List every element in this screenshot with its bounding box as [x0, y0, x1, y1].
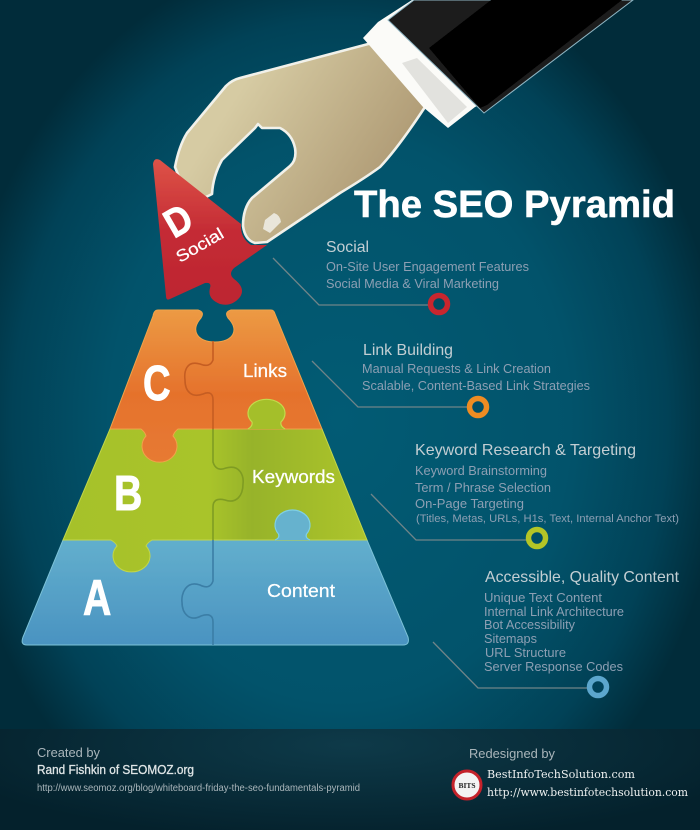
cuff fold	[402, 58, 467, 123]
ring marker blue	[590, 678, 606, 696]
letter B: B	[114, 467, 142, 521]
logo: BITS: BITS	[458, 781, 476, 790]
callout: Link Building: Scalable, Content-Based Link Strategies	[362, 378, 590, 393]
callout: Social: Social Media & Viral Marketing	[326, 276, 499, 291]
callout: Keyword Research: Keyword Research & Targeting	[415, 442, 636, 459]
puzzle pyramid	[22, 310, 408, 645]
callout: Accessible Content: Internal Link Architecture	[484, 604, 624, 619]
tier A tab	[275, 510, 310, 540]
footer credits left: Created by	[37, 746, 101, 760]
ring marker green	[528, 530, 546, 546]
footer credits right	[453, 747, 689, 799]
callout: Accessible Content	[433, 569, 680, 696]
tier A: Content	[22, 540, 408, 645]
callout: Accessible Content: URL Structure	[485, 645, 566, 660]
callout: Link Building	[312, 342, 590, 416]
footer credits left: http://www.seomoz.org/blog/whiteboard-friday-the-seo-fundamentals-pyramid	[37, 783, 360, 794]
callout: Accessible Content: Bot Accessibility	[484, 617, 575, 632]
tier B tab	[248, 399, 285, 429]
puzzle piece D: Social	[153, 159, 267, 305]
callout: Link Building: Manual Requests & Link Creation	[362, 361, 551, 376]
letter D: D	[156, 196, 201, 247]
ring marker red	[430, 296, 448, 312]
letter C: C	[143, 357, 171, 411]
callout: Accessible Content: Accessible, Quality Content	[485, 569, 680, 586]
footer band	[0, 729, 700, 830]
jacket sleeve	[388, 0, 633, 113]
footer credits right: http://www.bestinfotechsolution.com	[487, 786, 689, 799]
label Content: Content	[267, 581, 335, 601]
callout: Keyword Research: (Titles, Metas, URLs, H1s, Text, Internal Anchor Text)	[416, 513, 679, 525]
tier C: Links	[110, 310, 322, 462]
jacket black interior	[429, 0, 622, 108]
footer credits right: BestInfoTechSolution.com	[487, 767, 635, 781]
vertical puzzle seams	[182, 341, 243, 645]
callout: Keyword Research: Term / Phrase Selection	[415, 480, 551, 495]
hand and sleeve	[175, 0, 633, 243]
tier B: Keywords	[63, 429, 367, 572]
ring marker orange	[470, 398, 486, 416]
callout: Social	[273, 239, 529, 312]
letter A: A	[83, 569, 111, 626]
label Social: Social	[173, 225, 227, 266]
callout: Accessible Content: Server Response Codes	[484, 659, 623, 674]
shirt cuff	[363, 0, 490, 128]
title: The SEO Pyramid	[354, 184, 675, 226]
label Keywords: Keywords	[252, 467, 335, 487]
callout: Keyword Research: Keyword Brainstorming	[415, 463, 547, 478]
callout: Keyword Research	[371, 442, 679, 546]
footer credits left: Rand Fishkin of SEOMOZ.org	[37, 762, 194, 777]
callout: Social: Social	[326, 239, 369, 256]
logo: BITS	[453, 771, 481, 799]
icon: hand	[175, 43, 445, 243]
callout: Accessible Content: Sitemaps	[484, 631, 537, 646]
callout: Link Building: Link Building	[363, 342, 453, 359]
footer credits left	[37, 746, 360, 794]
callout: Social: On-Site User Engagement Features	[326, 259, 529, 274]
thumbnail	[263, 213, 281, 233]
callout: Keyword Research: On-Page Targeting	[415, 496, 524, 511]
callout: Accessible Content: Unique Text Content	[484, 590, 602, 605]
label Links: Links	[243, 361, 287, 381]
footer credits right: Redesigned by	[469, 747, 556, 761]
